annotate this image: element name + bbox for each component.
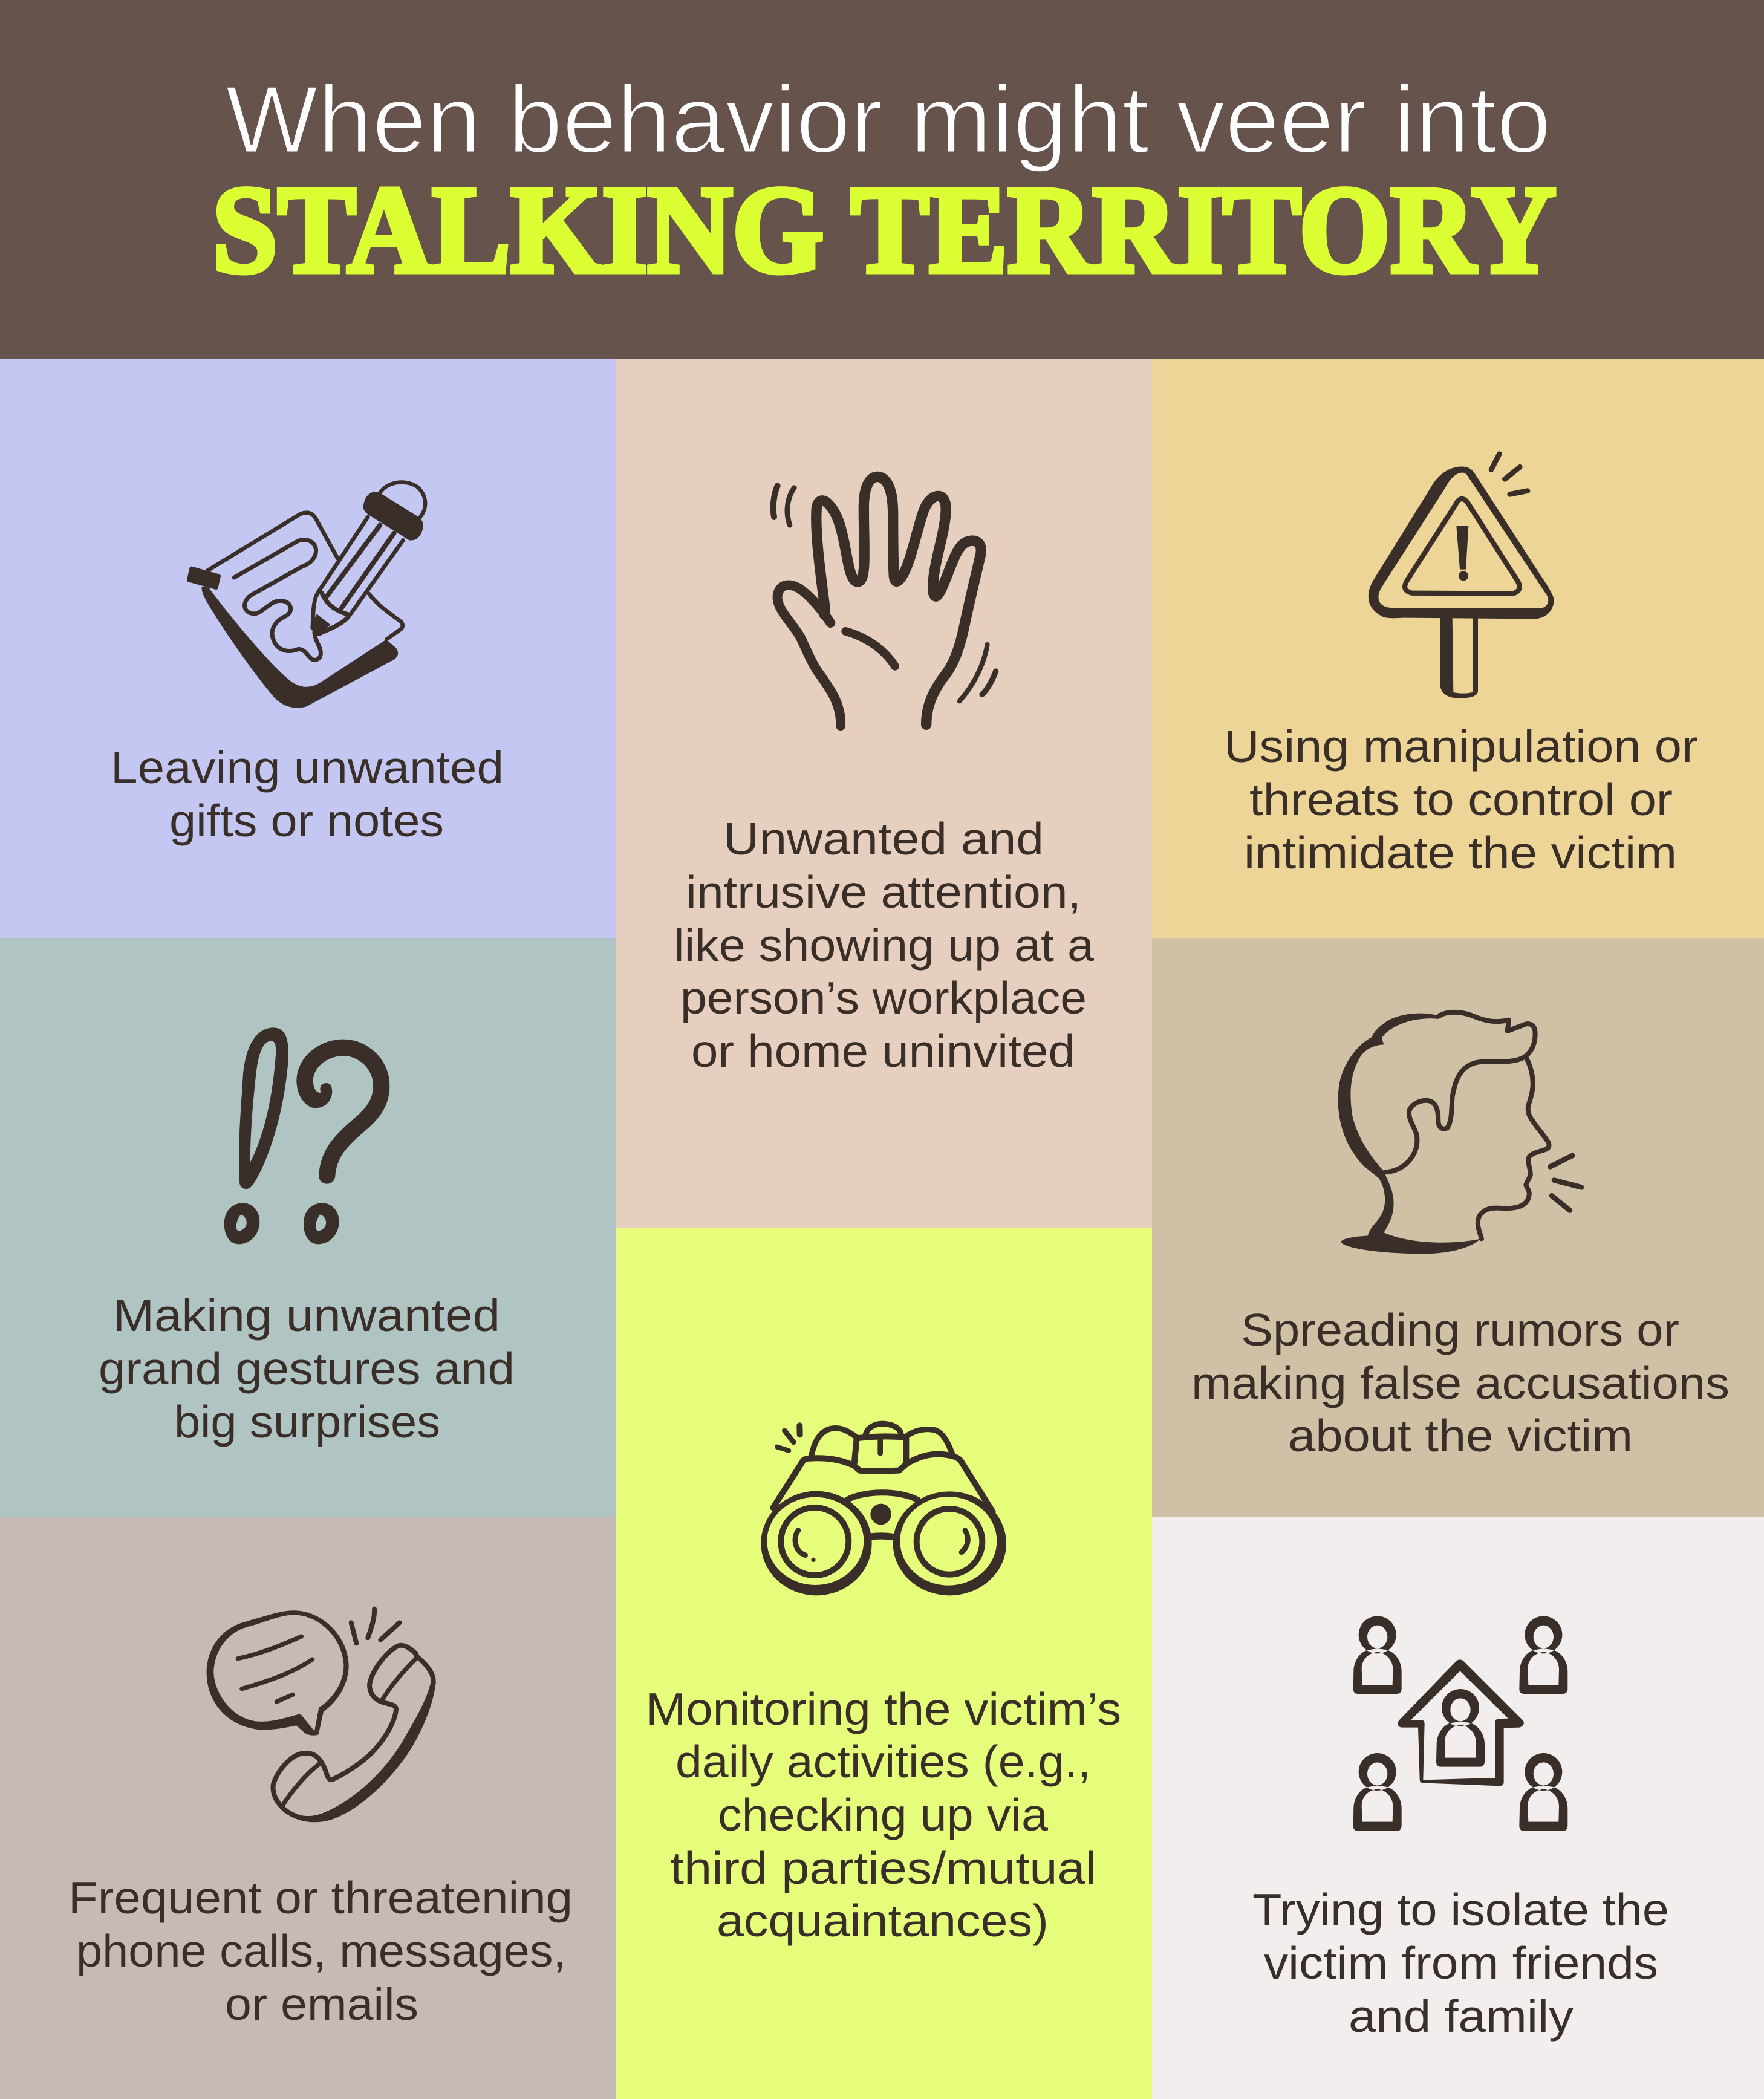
label: monitoring the victim's daily activities bbox=[646, 1684, 1121, 1946]
icon: talking head profile bbox=[1338, 1012, 1581, 1254]
panel: intrusive attention bbox=[616, 359, 1152, 1228]
label: unwanted and intrusive attention: like showing up at a bbox=[674, 920, 1094, 971]
icon: exclamation and question marks bbox=[224, 1027, 382, 1244]
label: frequent or threatening calls bbox=[68, 1872, 573, 2029]
label: unwanted and intrusive attention bbox=[674, 813, 1094, 1076]
label: unwanted and intrusive attention: or home uninvited bbox=[691, 1026, 1075, 1076]
label: unwanted and intrusive attention: person’s workplace bbox=[680, 972, 1087, 1023]
header banner bbox=[0, 0, 1764, 359]
panel: manipulation or threats bbox=[1152, 359, 1764, 938]
label: unwanted and intrusive attention: intrusive attention, bbox=[686, 867, 1081, 917]
panel: unwanted grand gestures bbox=[0, 938, 616, 1517]
label: monitoring the victim's daily activities: third parties/mutual bbox=[670, 1843, 1096, 1893]
icon: person in house surrounded by people bbox=[1353, 1616, 1567, 1831]
icon: speech bubble and phone bbox=[207, 1609, 436, 1822]
label: making unwanted grand gestures: big surprises bbox=[174, 1396, 440, 1447]
label: spreading rumors or false accusations: Spreading rumors or bbox=[1241, 1304, 1679, 1355]
title line 1: When behavior might veer into bbox=[226, 67, 1551, 173]
label: spreading rumors or false accusations bbox=[1191, 1304, 1730, 1461]
label: monitoring the victim's daily activities: Monitoring the victim’s bbox=[646, 1684, 1121, 1734]
panel: monitoring daily activities bbox=[616, 1228, 1152, 2099]
label: monitoring the victim's daily activities: checking up via bbox=[718, 1789, 1048, 1840]
label: trying to isolate the victim bbox=[1252, 1884, 1669, 2042]
icon: binoculars bbox=[761, 1424, 1006, 1595]
label: monitoring the victim's daily activities: daily activities (e.g., bbox=[675, 1736, 1091, 1787]
icon: note and pencil bbox=[189, 482, 425, 708]
label: using manipulation or threats: intimidate the victim bbox=[1244, 827, 1677, 878]
label: leaving unwanted gifts or notes: Leaving unwanted bbox=[111, 742, 504, 793]
label: frequent or threatening calls: phone calls, messages, bbox=[76, 1925, 566, 1976]
panel: spreading rumors bbox=[1152, 938, 1764, 1517]
label: trying to isolate the victim: victim from friends bbox=[1264, 1938, 1658, 1988]
label: spreading rumors or false accusations: making false accusations bbox=[1191, 1358, 1730, 1408]
label: making unwanted grand gestures bbox=[99, 1290, 515, 1447]
label: making unwanted grand gestures: Making unwanted bbox=[113, 1290, 500, 1341]
label: frequent or threatening calls: Frequent or threatening bbox=[68, 1872, 573, 1923]
icon: waving hand bbox=[773, 477, 996, 726]
label: monitoring the victim's daily activities: acquaintances) bbox=[717, 1895, 1049, 1946]
label: making unwanted grand gestures: grand gestures and bbox=[99, 1343, 515, 1394]
panel: unwanted gifts or notes bbox=[0, 359, 616, 938]
label: leaving unwanted gifts or notes bbox=[111, 742, 504, 846]
label: using manipulation or threats: Using manipulation or bbox=[1224, 721, 1698, 772]
panel: frequent calls and messages bbox=[0, 1517, 616, 2099]
label: unwanted and intrusive attention: Unwanted and bbox=[723, 813, 1044, 864]
label: using manipulation or threats bbox=[1224, 721, 1698, 878]
icon: warning sign bbox=[1369, 454, 1554, 698]
title line 2: STALKING TERRITORY bbox=[212, 160, 1556, 299]
label: trying to isolate the victim: Trying to isolate the bbox=[1252, 1884, 1669, 1935]
label: frequent or threatening calls: or emails bbox=[225, 1979, 418, 2029]
label: using manipulation or threats: threats to control or bbox=[1249, 774, 1673, 825]
label: leaving unwanted gifts or notes: gifts or notes bbox=[169, 795, 444, 846]
label: spreading rumors or false accusations: about the victim bbox=[1288, 1410, 1633, 1461]
label: trying to isolate the victim: and family bbox=[1349, 1991, 1574, 2042]
panel: isolating the victim bbox=[1152, 1517, 1764, 2099]
